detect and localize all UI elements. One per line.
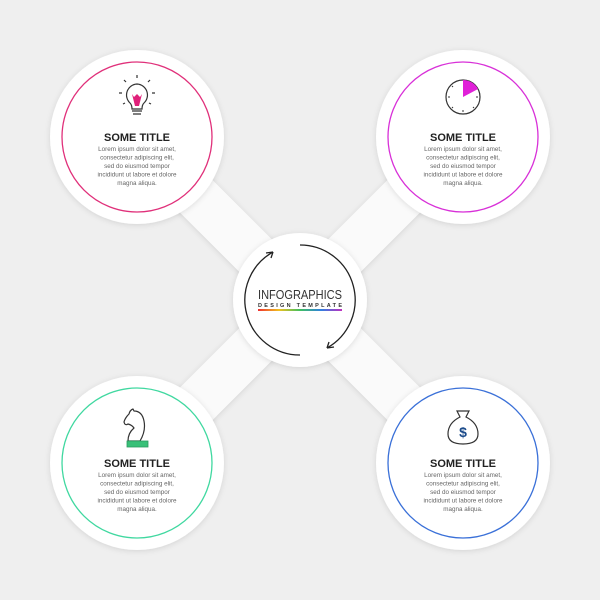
title: SOME TITLE: [430, 458, 496, 470]
icon: light bulb: [119, 75, 155, 114]
text block: magna aliqua.: [117, 506, 157, 513]
text block: consectetur adipiscing elit,: [426, 480, 500, 488]
icon: clock: [446, 80, 480, 114]
panel: bottom-left: [50, 376, 224, 550]
text block: incididunt ut labore et dolore: [423, 498, 503, 504]
icon: money bag: $: [459, 424, 467, 440]
text block: Lorem ipsum dolor sit amet,: [424, 146, 502, 153]
title: SOME TITLE: [430, 132, 496, 144]
logo text: INFOGRAPHICS: [258, 288, 342, 302]
panel: top-right: [376, 50, 550, 224]
arrows: circular: [245, 245, 355, 355]
text block: sed do eiusmod tempor: [104, 163, 170, 170]
title: SOME TITLE: [104, 132, 170, 144]
text block: incididunt ut labore et dolore: [97, 172, 177, 178]
text block: incididunt ut labore et dolore: [423, 172, 503, 178]
text block: magna aliqua.: [117, 180, 157, 187]
text block: Lorem ipsum dolor sit amet,: [98, 146, 176, 153]
text block: Lorem ipsum dolor sit amet,: [98, 472, 176, 479]
text block: Lorem ipsum dolor sit amet,: [424, 472, 502, 479]
icon: chess knight: [124, 409, 148, 447]
connector bars: [128, 128, 472, 472]
text block: magna aliqua.: [443, 506, 483, 513]
panel: top-left: [50, 50, 224, 224]
icon: money bag: [448, 411, 478, 444]
text block: consectetur adipiscing elit,: [100, 480, 174, 488]
center hub: [233, 233, 367, 367]
text block: magna aliqua.: [443, 180, 483, 187]
text block: incididunt ut labore et dolore: [97, 498, 177, 504]
title: SOME TITLE: [104, 458, 170, 470]
text block: sed do eiusmod tempor: [104, 489, 170, 496]
center hub: DESIGN TEMPLATE: [258, 303, 342, 309]
text block: sed do eiusmod tempor: [430, 489, 496, 496]
text block: consectetur adipiscing elit,: [426, 154, 500, 162]
panel: bottom-right: [376, 376, 550, 550]
text block: sed do eiusmod tempor: [430, 163, 496, 170]
text block: consectetur adipiscing elit,: [100, 154, 174, 162]
